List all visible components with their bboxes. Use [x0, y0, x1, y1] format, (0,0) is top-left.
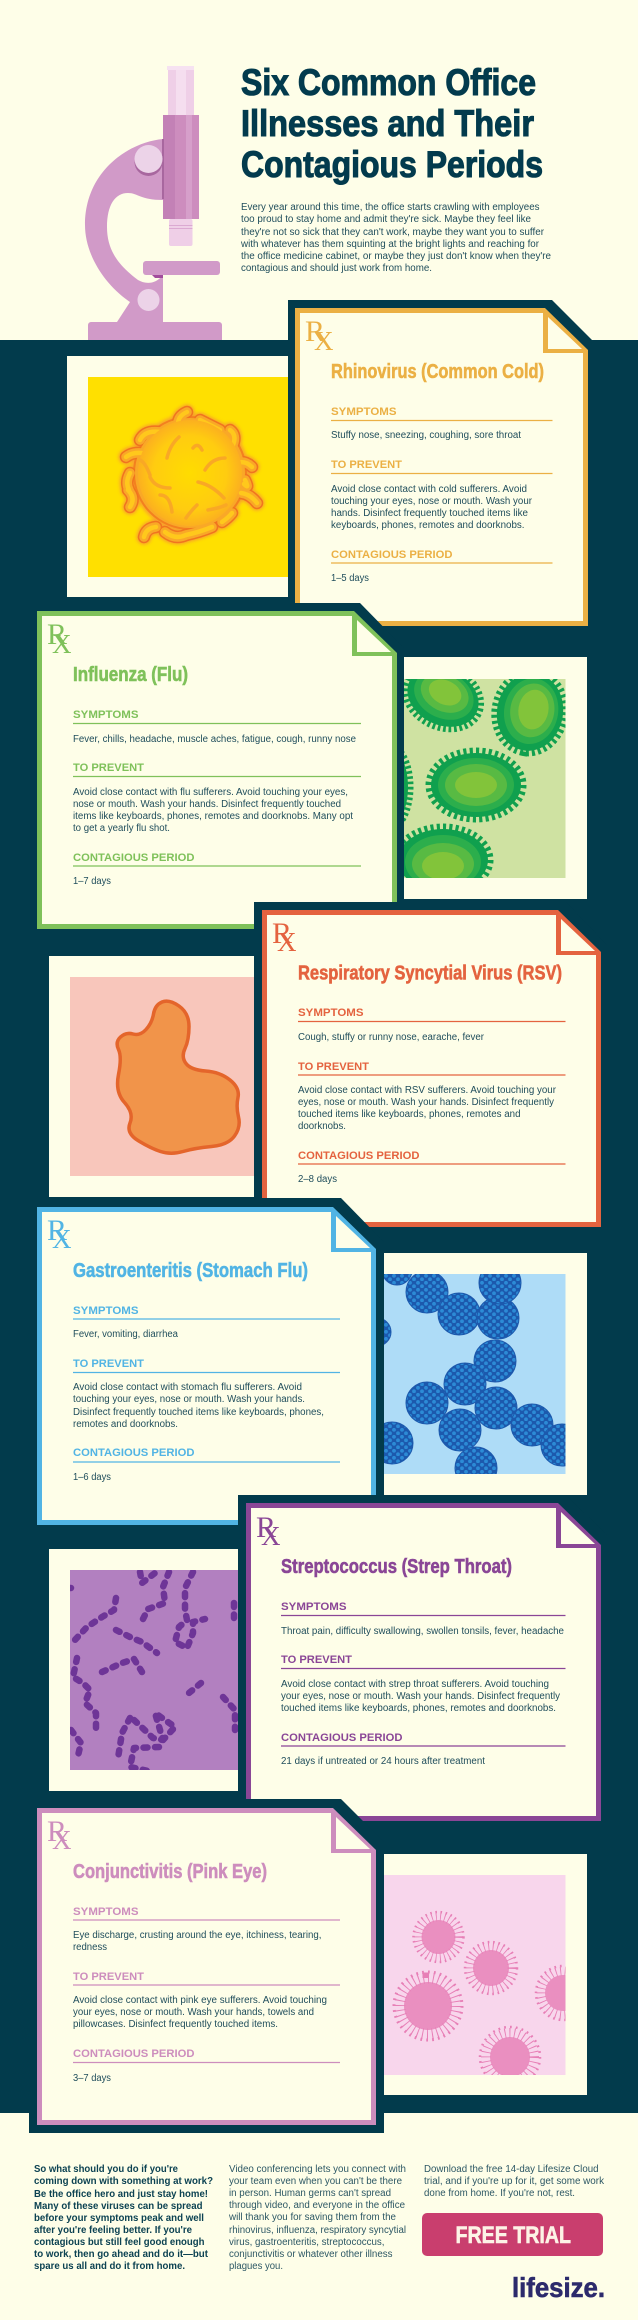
contagious period: CONTAGIOUS PERIOD — [331, 549, 453, 561]
heading: gastroenteritis: Gastroenteritis (Stomach Flu) — [73, 1259, 308, 1282]
footer column 2: conjunctivitis or whatever other illness — [229, 2249, 392, 2260]
button: free trial — [422, 2213, 603, 2256]
symptoms: SYMPTOMS — [281, 1601, 346, 1613]
symptoms — [73, 1906, 340, 1953]
footer column 2: your team even when you can't be there — [229, 2176, 402, 2187]
to prevent: your eyes, nose or mouth. Wash your hands, towels and — [73, 2007, 314, 2018]
photo: streptococcus — [49, 1549, 238, 1791]
symptoms — [281, 1601, 566, 1637]
symptoms: SYMPTOMS — [73, 1906, 138, 1918]
icon: Rx green: R — [47, 618, 67, 651]
paper: gastroenteritis — [37, 1207, 376, 1525]
card: RSV — [262, 910, 601, 1227]
icon: Rx gold: X — [314, 326, 334, 356]
footer column 2: in person. Human germs can't spread — [229, 2188, 391, 2199]
footer column 1: coming down with something at work? — [34, 2176, 213, 2187]
intro text: contagious and should just work from home. — [241, 263, 432, 274]
to prevent — [73, 1971, 340, 2030]
footer column 2: virus, gastroenteritis, streptococcus, — [229, 2237, 384, 2248]
to prevent: TO PREVENT — [298, 1061, 369, 1073]
footer column 1: contagious but still feel good enough — [34, 2237, 204, 2248]
symptoms: Cough, stuffy or runny nose, earache, fever — [298, 1032, 485, 1043]
footer column 3: done from home. If you're not, rest. — [424, 2188, 575, 2199]
to prevent: TO PREVENT — [331, 459, 402, 471]
symptoms: SYMPTOMS — [331, 406, 396, 418]
to prevent: Disinfect frequently touched items like keyboards, phones, — [73, 1407, 324, 1418]
footer column 3 — [424, 2164, 605, 2199]
symptoms: Eye discharge, crusting around the eye, itchiness, tearing, — [73, 1930, 322, 1941]
symptoms: SYMPTOMS — [73, 1305, 138, 1317]
card outline: gastroenteritis — [29, 1198, 384, 1498]
symptoms: SYMPTOMS — [73, 709, 138, 721]
footer column 2: Video conferencing lets you connect with — [229, 2164, 406, 2175]
card: streptococcus — [246, 1503, 601, 1821]
header title — [241, 62, 543, 185]
to prevent: Avoid close contact with stomach flu sufferers. Avoid — [73, 1382, 302, 1393]
icon: Rx gold — [305, 315, 334, 356]
footer column 2: plagues you. — [229, 2261, 283, 2272]
symptoms: Throat pain, difficulty swallowing, swollen tonsils, fever, headache — [281, 1626, 564, 1637]
contagious period: 3–7 days — [73, 2073, 111, 2084]
card: rhinovirus — [295, 308, 588, 626]
to prevent: hands. Disinfect frequently touched items like — [331, 508, 528, 519]
card outline: influenza — [29, 603, 404, 902]
intro text — [240, 202, 551, 274]
to prevent — [73, 762, 361, 834]
to prevent: touched items like keyboards, phones, remotes and — [298, 1109, 520, 1120]
photo: influenza — [404, 657, 587, 899]
footer column 2: rhinovirus, influenza, respiratory syncytial — [229, 2225, 406, 2236]
to prevent: touched items like keyboards, phones, remotes and doorknobs. — [281, 1703, 556, 1714]
icon: Rx red: X — [277, 927, 297, 957]
card: conjunctivitis — [37, 1808, 376, 2125]
to prevent — [298, 1061, 566, 1132]
to prevent: items like keyboards, phones, remotes and doorknobs. Many opt — [73, 811, 353, 822]
icon: Rx blue: R — [47, 1214, 67, 1247]
to prevent: nose or mouth. Wash your hands. Disinfect frequently touched — [73, 799, 341, 810]
to prevent: touching your eyes, nose or mouth. Wash your hands. — [73, 1394, 305, 1405]
symptoms: redness — [73, 1942, 107, 1953]
footer column 1: Many of these viruses can be spread — [34, 2201, 202, 2212]
symptoms: SYMPTOMS — [298, 1007, 364, 1019]
symptoms — [331, 406, 552, 441]
intro text: they're not so sick that they can't work, maybe they want you to suffer — [241, 227, 545, 238]
icon: microscope — [85, 66, 222, 346]
icon: Rx gold: R — [305, 315, 325, 348]
header title: Contagious Periods — [241, 144, 543, 185]
to prevent: Avoid close contact with strep throat sufferers. Avoid touching — [281, 1679, 549, 1690]
to prevent: your eyes, nose or mouth. Wash your hands. Disinfect frequently — [281, 1691, 560, 1702]
to prevent: touching your eyes, nose or mouth. Wash your — [331, 496, 533, 507]
symptoms — [73, 709, 361, 745]
contagious period: CONTAGIOUS PERIOD — [73, 852, 195, 864]
symptoms — [298, 1007, 566, 1043]
intro text: Every year around this time, the office starts crawling with employees — [241, 202, 540, 213]
photo: gastroenteritis — [363, 1253, 587, 1495]
to prevent: TO PREVENT — [281, 1654, 352, 1666]
icon: Rx pink: X — [52, 1825, 72, 1855]
heading: streptococcus: Streptococcus (Strep Throat) — [281, 1555, 512, 1578]
photo: conjunctivitis — [384, 1854, 590, 2095]
to prevent: TO PREVENT — [73, 1971, 144, 1983]
footer column 1: after you're feeling better. If you're — [34, 2225, 192, 2236]
footer column 2 — [228, 2164, 406, 2272]
paper: rhinovirus — [295, 308, 588, 626]
to prevent: Avoid close contact with pink eye sufferers. Avoid touching — [73, 1995, 327, 2006]
intro text: too proud to stay home and admit they're sick. Maybe they feel like — [241, 214, 531, 225]
to prevent: remotes and doorknobs. — [73, 1419, 178, 1430]
to prevent: Avoid close contact with flu sufferers. Avoid touching your eyes, — [73, 787, 348, 798]
icon: Rx pink — [47, 1815, 72, 1855]
card: influenza — [37, 611, 397, 929]
footer column 1: before your symptoms peak and well — [34, 2213, 204, 2224]
footer column 1: Be the office hero and just stay home! — [34, 2189, 208, 2200]
to prevent: doorknobs. — [298, 1121, 346, 1132]
heading: influenza: Influenza (Flu) — [73, 663, 188, 686]
to prevent — [331, 459, 552, 531]
to prevent: keyboards, phones, remotes and doorknobs. — [331, 520, 524, 531]
button: free trial: FREE TRIAL — [456, 2222, 571, 2249]
symptoms: Fever, vomiting, diarrhea — [73, 1329, 178, 1340]
icon: Rx red: R — [272, 917, 292, 950]
to prevent: to get a yearly flu shot. — [73, 823, 170, 834]
to prevent — [281, 1654, 566, 1714]
contagious period: CONTAGIOUS PERIOD — [281, 1732, 403, 1744]
header title: Illnesses and Their — [241, 103, 534, 144]
icon: Rx blue — [47, 1214, 72, 1254]
header title: Six Common Office — [241, 62, 536, 103]
to prevent: TO PREVENT — [73, 1358, 144, 1370]
card outline: conjunctivitis — [29, 1799, 384, 2133]
contagious period — [331, 549, 552, 584]
contagious period: CONTAGIOUS PERIOD — [73, 2048, 195, 2060]
paper: streptococcus — [246, 1503, 601, 1821]
logo: lifesize: lifesize. — [512, 2272, 605, 2303]
footer column 2: through video, and everyone in the office — [229, 2200, 405, 2211]
footer column 1 — [34, 2164, 213, 2272]
card outline: streptococcus — [238, 1495, 607, 1800]
to prevent: eyes, nose or mouth. Wash your hands. Disinfect frequently — [298, 1097, 554, 1108]
contagious period — [73, 1447, 340, 1483]
paper: conjunctivitis — [37, 1808, 376, 2125]
footer column 3: trial, and if you're up for it, get some work — [424, 2176, 605, 2187]
footer column 2: will thank you for saving them from the — [228, 2212, 396, 2223]
contagious period: 2–8 days — [298, 1174, 337, 1185]
heading: conjunctivitis: Conjunctivitis (Pink Eye) — [73, 1860, 267, 1883]
symptoms: Stuffy nose, sneezing, coughing, sore throat — [331, 430, 521, 441]
footer column 3: Download the free 14-day Lifesize Cloud — [424, 2164, 598, 2175]
contagious period: 1–6 days — [73, 1472, 111, 1483]
icon: Rx green — [47, 618, 72, 659]
contagious period — [298, 1150, 566, 1185]
card: gastroenteritis — [37, 1207, 376, 1525]
contagious period: CONTAGIOUS PERIOD — [73, 1447, 195, 1459]
icon: Rx purple: R — [256, 1511, 276, 1544]
intro text: the office medicine cabinet, or maybe they just don't know when they're — [241, 251, 551, 262]
dark background band — [0, 340, 638, 2133]
icon: Rx green: X — [52, 629, 72, 659]
to prevent: Avoid close contact with RSV sufferers. Avoid touching your — [298, 1085, 557, 1096]
icon: Rx blue: X — [52, 1224, 72, 1254]
photo: RSV — [49, 956, 254, 1197]
card outline: RSV — [254, 902, 607, 1200]
contagious period: 21 days if untreated or 24 hours after treatment — [281, 1756, 485, 1767]
heading: RSV: Respiratory Syncytial Virus (RSV) — [298, 962, 562, 984]
paper: influenza — [37, 611, 397, 929]
intro text: with whatever has them squinting at the bright lights and reaching for — [240, 239, 540, 250]
photo: rhinovirus — [67, 356, 288, 597]
heading: rhinovirus: Rhinovirus (Common Cold) — [331, 360, 544, 383]
contagious period — [281, 1732, 566, 1767]
icon: Rx purple: X — [261, 1521, 281, 1551]
contagious period — [73, 2048, 340, 2084]
contagious period: 1–5 days — [331, 573, 369, 584]
to prevent — [73, 1358, 340, 1430]
footer column 1: to work, then go ahead and do it—but — [34, 2249, 209, 2260]
symptoms: Fever, chills, headache, muscle aches, fatigue, cough, runny nose — [73, 734, 356, 745]
to prevent: Avoid close contact with cold sufferers. Avoid — [331, 484, 527, 495]
symptoms — [73, 1305, 340, 1340]
icon: Rx purple — [256, 1511, 281, 1551]
footer column 1: So what should you do if you're — [34, 2164, 178, 2175]
contagious period — [73, 852, 361, 887]
card outline: rhinovirus — [288, 300, 592, 620]
contagious period: CONTAGIOUS PERIOD — [298, 1150, 420, 1162]
paper: RSV — [262, 910, 601, 1227]
to prevent: TO PREVENT — [73, 762, 144, 774]
to prevent: pillowcases. Disinfect frequently touched items. — [73, 2019, 278, 2030]
contagious period: 1–7 days — [73, 876, 111, 887]
footer column 1: spare us all and do it from home. — [34, 2261, 185, 2272]
icon: Rx red — [272, 917, 297, 957]
icon: Rx pink: R — [47, 1815, 67, 1848]
